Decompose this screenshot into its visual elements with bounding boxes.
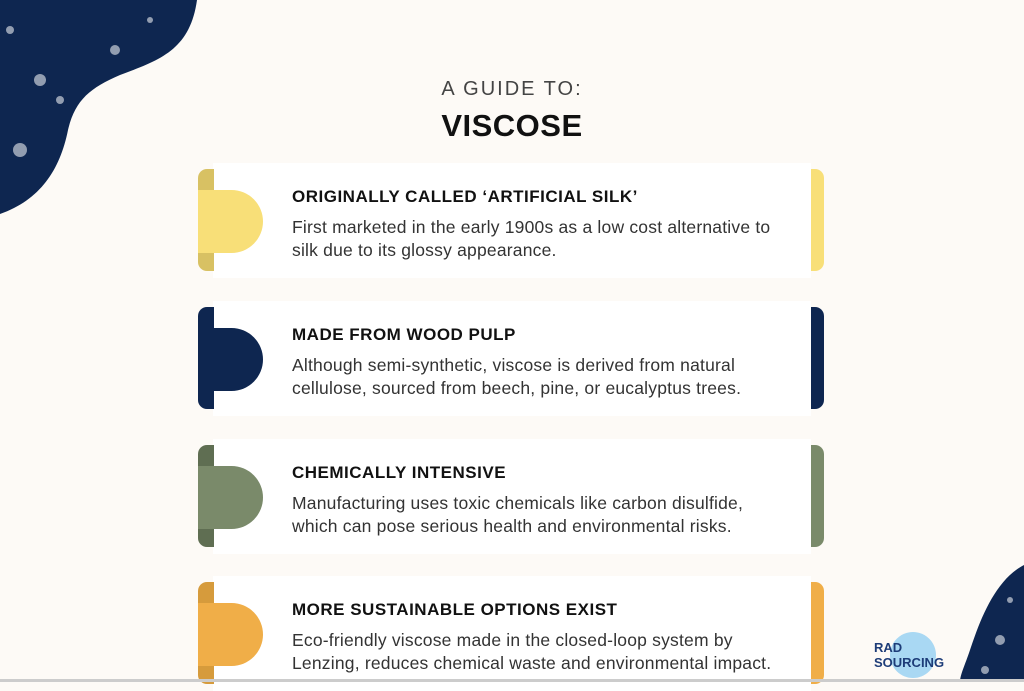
bottom line: [0, 679, 1024, 682]
card 1: First marketed in the early 1900s as a low cost alternative to: [292, 217, 770, 237]
logo: SOURCING: [874, 655, 944, 670]
decorative blob top-left: [0, 0, 197, 214]
logo: RAD: [874, 640, 902, 655]
card 1: silk due to its glossy appearance.: [292, 240, 557, 260]
card 2: Although semi-synthetic, viscose is derived from natural: [292, 355, 735, 375]
subtitle: A GUIDE TO:: [441, 78, 583, 100]
card 3: [198, 439, 824, 554]
card 4: MORE SUSTAINABLE OPTIONS EXIST: [292, 600, 617, 619]
card 4: Eco-friendly viscose made in the closed-loop system by: [292, 630, 733, 650]
card 3: CHEMICALLY INTENSIVE: [292, 463, 506, 482]
card 2: [198, 301, 824, 416]
card 3: which can pose serious health and environmental risks.: [292, 516, 732, 536]
card 3: Manufacturing uses toxic chemicals like carbon disulfide,: [292, 493, 743, 513]
card 4: Lenzing, reduces chemical waste and environmental impact.: [292, 653, 771, 673]
decorative blob bottom-right: [960, 565, 1024, 679]
title: VISCOSE: [441, 108, 583, 143]
card 4: [198, 576, 824, 691]
card 2: MADE FROM WOOD PULP: [292, 325, 516, 344]
logo: [874, 632, 944, 678]
card 1: ORIGINALLY CALLED ‘ARTIFICIAL SILK’: [292, 187, 638, 206]
card 2: cellulose, sourced from beech, pine, or eucalyptus trees.: [292, 378, 741, 398]
card 1: [198, 163, 824, 278]
